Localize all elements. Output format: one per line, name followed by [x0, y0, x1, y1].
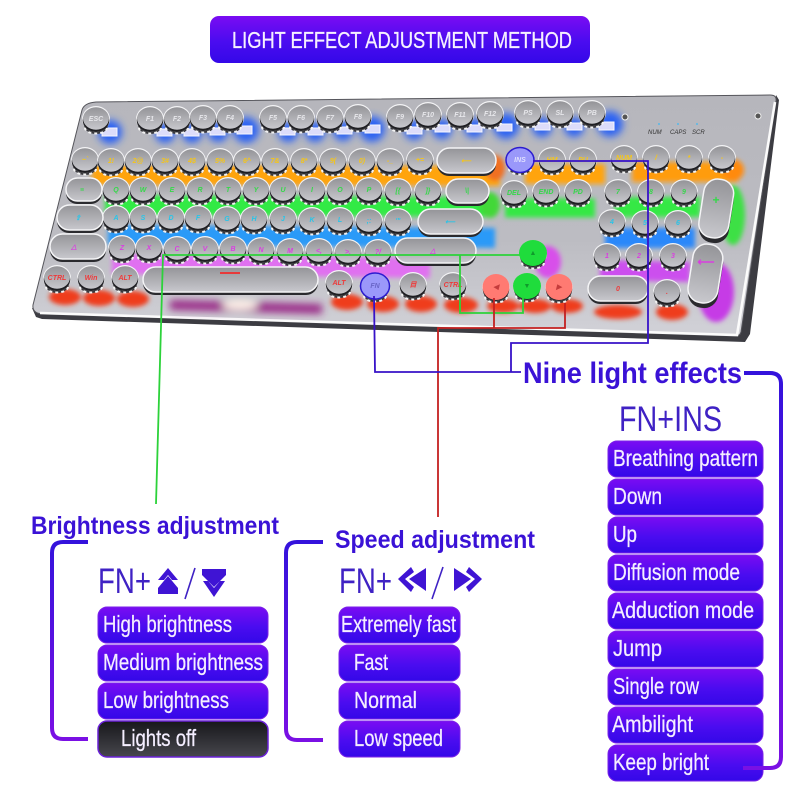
key row: ZXCV: C	[174, 246, 180, 253]
key row: function keys: F12	[484, 111, 496, 118]
option: Normal	[339, 683, 460, 719]
key row: ZXCV: <,	[316, 248, 322, 255]
option: Jump: Jump	[613, 635, 662, 661]
key row: ZXCV: 2	[636, 253, 641, 260]
key row: number keys: 3#	[161, 158, 169, 165]
indicator labels	[622, 113, 761, 136]
key row: ZXCV: V	[203, 246, 209, 253]
key row: ASDF: L	[338, 217, 342, 224]
option: Lights off	[98, 721, 268, 757]
key row: ZXCV: ?/	[375, 249, 382, 256]
key row: bottom modifiers: .	[666, 289, 668, 296]
key row: QWERTY: ≡	[80, 187, 84, 194]
key row: number keys: 7&	[271, 158, 279, 165]
key combo: FN + up/down	[98, 562, 226, 601]
heading: brightness adjustment: Brightness adjustment	[31, 512, 280, 540]
key row: ASDF: ⇪	[75, 214, 81, 222]
option: Down: Down	[613, 483, 662, 509]
key row: bottom modifiers: ⟵	[697, 255, 715, 269]
indicator labels: CAPS	[670, 130, 686, 136]
option: Medium brightness	[98, 645, 268, 681]
key row: ASDF: ⟵	[445, 219, 456, 226]
option: Ambilight: Ambilight	[612, 711, 694, 737]
option: Keep bright: Keep bright	[613, 749, 709, 775]
heading: nine light effects: Nine light effects	[523, 357, 742, 390]
key row: QWERTY: PD	[573, 189, 583, 196]
key row: QWERTY: DEL	[507, 190, 521, 197]
key row: QWERTY: W	[140, 187, 148, 194]
option: Low brightness	[98, 683, 268, 719]
title banner: LIGHT EFFECT ADJUSTMENT METHOD	[232, 27, 572, 53]
key row: bottom modifiers: Win	[85, 275, 97, 282]
key row: QWERTY: P	[367, 187, 372, 194]
keyboard body	[32, 95, 779, 342]
option: Low brightness: Low brightness	[103, 687, 229, 713]
option: High brightness	[98, 607, 268, 643]
key row: function keys: F3	[199, 115, 207, 122]
key row: number keys: /	[654, 155, 658, 162]
key row: bottom modifiers: +	[712, 193, 720, 207]
option: Up	[608, 517, 763, 553]
key row: function keys: ESC	[89, 116, 104, 123]
key row: ZXCV: >.	[345, 249, 351, 256]
key row: bottom modifiers: 目	[410, 281, 418, 289]
key row: QWERTY: R	[197, 187, 203, 194]
bracket: nine light effects	[743, 373, 781, 768]
key row: function keys: F2	[173, 116, 181, 123]
option: Diffusion mode	[608, 555, 763, 591]
key row: QWERTY: [{	[394, 188, 402, 195]
key row: number keys: 0)	[359, 158, 366, 165]
key combo: FN + left/right: FN+	[339, 562, 392, 601]
key row: number keys	[71, 145, 736, 176]
heading: speed adjustment: Speed adjustment	[335, 526, 536, 554]
key row: ASDF: 4	[609, 219, 614, 226]
key row: number keys: 1!	[108, 158, 115, 165]
key row: number keys: 4$	[187, 158, 196, 165]
key row: ASDF: F	[196, 215, 201, 222]
option: Up: Up	[613, 521, 637, 547]
key row: ZXCV: Z	[119, 245, 125, 252]
option: Extremely fast	[339, 607, 460, 643]
key row: QWERTY: T	[226, 187, 231, 194]
option: Medium brightness: Medium brightness	[103, 649, 263, 675]
key row: number keys: *	[688, 155, 691, 162]
key row: number keys: 5%	[215, 158, 226, 165]
option: Single row	[608, 669, 763, 705]
option: Low speed: Low speed	[354, 725, 443, 751]
indicator labels: NUM	[648, 130, 662, 136]
key row: function keys	[82, 100, 606, 134]
key row: ZXCV: △	[429, 248, 436, 255]
option: Low speed	[339, 721, 460, 757]
key row: QWERTY: Q	[113, 187, 119, 194]
bracket: speed	[286, 542, 323, 740]
key row: number keys: PU	[578, 157, 589, 164]
speed keys: ◀	[493, 284, 500, 291]
key row: ASDF: ;:	[367, 218, 371, 225]
key row: QWERTY: Y	[254, 187, 260, 194]
key row: function keys: F1	[146, 116, 154, 123]
key row: function keys: PB	[587, 110, 597, 117]
key row: ZXCV: △	[70, 244, 77, 251]
key row: function keys: F7	[326, 115, 335, 122]
key row: function keys: F5	[269, 115, 277, 122]
option: Down	[608, 479, 763, 515]
option: Normal: Normal	[354, 687, 417, 713]
key row: QWERTY: I	[311, 187, 314, 194]
option: Breathing pattern	[608, 441, 763, 477]
key row: ASDF: 6	[676, 220, 680, 227]
key row: QWERTY: 7	[616, 189, 621, 196]
key row: number keys: ~`	[82, 157, 89, 164]
key row: function keys: F10	[422, 112, 434, 119]
panel: speed adjustment	[286, 526, 536, 757]
key row: ASDF: 5	[643, 220, 647, 227]
key row: QWERTY: O	[337, 187, 343, 194]
key row: number keys: 6^	[243, 157, 252, 165]
highlighted keys	[360, 147, 573, 303]
option: Adduction mode: Adduction mode	[612, 597, 754, 623]
option: Keep bright	[608, 745, 763, 781]
bracket: brightness	[52, 542, 88, 739]
connector: nine light effects (blue)	[374, 161, 648, 372]
option: Breathing pattern: Breathing pattern	[613, 445, 758, 471]
key row: function keys: PS	[523, 110, 533, 117]
key row: function keys: F11	[454, 112, 466, 119]
panel: brightness adjustment	[31, 512, 280, 757]
indicator labels: SCR	[692, 130, 705, 136]
key row: QWERTY: 9	[682, 189, 686, 196]
key row: ZXCV: N	[258, 247, 264, 254]
option: High brightness: High brightness	[103, 611, 232, 637]
key row: number keys: NUM	[616, 155, 632, 162]
speed keys	[482, 274, 573, 303]
key row: QWERTY: \|	[465, 188, 469, 195]
option: Ambilight	[608, 707, 763, 743]
under-key glow	[49, 111, 745, 322]
speed keys: ▶	[555, 284, 563, 291]
option: Diffusion mode: Diffusion mode	[613, 559, 740, 585]
key row: ASDF	[57, 205, 692, 238]
INS key	[506, 147, 534, 175]
keyboard illustration	[32, 95, 779, 342]
key row: ZXCV: M	[287, 248, 293, 255]
option: Lights off: Lights off	[121, 725, 196, 751]
FN key	[360, 273, 390, 302]
title banner	[210, 16, 590, 63]
key row: bottom modifiers: 0	[616, 286, 620, 293]
key row: QWERTY: E	[170, 187, 175, 194]
key row: ASDF: K	[309, 217, 315, 224]
brightness keys: ▼	[524, 283, 530, 290]
INS key: INS	[514, 157, 526, 164]
key row: bottom modifiers: ALT	[331, 280, 346, 287]
key row: number keys: 9(	[330, 158, 337, 165]
key row: ASDF: S	[141, 215, 146, 222]
key row: ZXCV: B	[230, 246, 236, 253]
key row: function keys: SL	[556, 110, 564, 117]
connector: speed (red)	[438, 298, 565, 517]
key row: QWERTY: U	[280, 187, 286, 194]
key row: bottom modifiers: CTRL	[444, 282, 462, 289]
option: Extremely fast: Extremely fast	[341, 611, 456, 637]
connector: brightness (green)	[156, 255, 523, 504]
key row: function keys: F6	[297, 115, 305, 122]
key row: function keys: F9	[396, 114, 404, 121]
key row: function keys: F8	[354, 114, 362, 121]
key combo: FN+INS: FN+INS	[619, 400, 722, 439]
key row: ASDF: J	[281, 216, 286, 223]
brightness keys: ▲	[530, 250, 536, 257]
key combo: FN + left/right	[339, 562, 482, 601]
key row: ZXCV	[50, 234, 687, 271]
panel: nine light effects	[523, 357, 781, 781]
brightness keys	[513, 240, 547, 302]
key row: number keys: HM	[547, 157, 558, 164]
key row: bottom modifiers	[43, 177, 737, 310]
key row: QWERTY	[66, 177, 698, 208]
key row: ZXCV: X	[146, 245, 153, 252]
key row: QWERTY: END	[539, 189, 553, 196]
key row: ASDF: D	[168, 215, 174, 222]
key row: ASDF: '"	[396, 218, 401, 225]
option: Fast: Fast	[354, 649, 388, 675]
key row: ZXCV: 3	[671, 253, 675, 260]
FN key: FN	[370, 283, 381, 290]
key row: number keys: -_	[387, 158, 393, 165]
key row: number keys: -	[721, 155, 724, 162]
key row: number keys: ⟵	[461, 158, 472, 165]
key row: ASDF: G	[224, 216, 230, 223]
key row: ZXCV: 1	[605, 253, 609, 260]
option: Single row: Single row	[613, 673, 699, 699]
option: Adduction mode	[608, 593, 763, 629]
key row: QWERTY: ]}	[424, 188, 431, 195]
key row: ASDF: A	[112, 215, 119, 222]
option: Fast	[339, 645, 460, 681]
key row: bottom modifiers: ALT	[117, 275, 132, 282]
key row: bottom modifiers: CTRL	[48, 275, 66, 282]
key row: function keys: F4	[226, 115, 234, 122]
key row: ASDF: H	[251, 216, 257, 223]
key row: number keys: 2@	[132, 158, 144, 165]
key row: QWERTY: 8	[649, 189, 653, 196]
option: Jump	[608, 631, 763, 667]
key row: number keys: +=	[416, 157, 424, 164]
key combo: FN + up/down: FN+	[98, 562, 151, 601]
key row: number keys: 8*	[301, 158, 308, 165]
